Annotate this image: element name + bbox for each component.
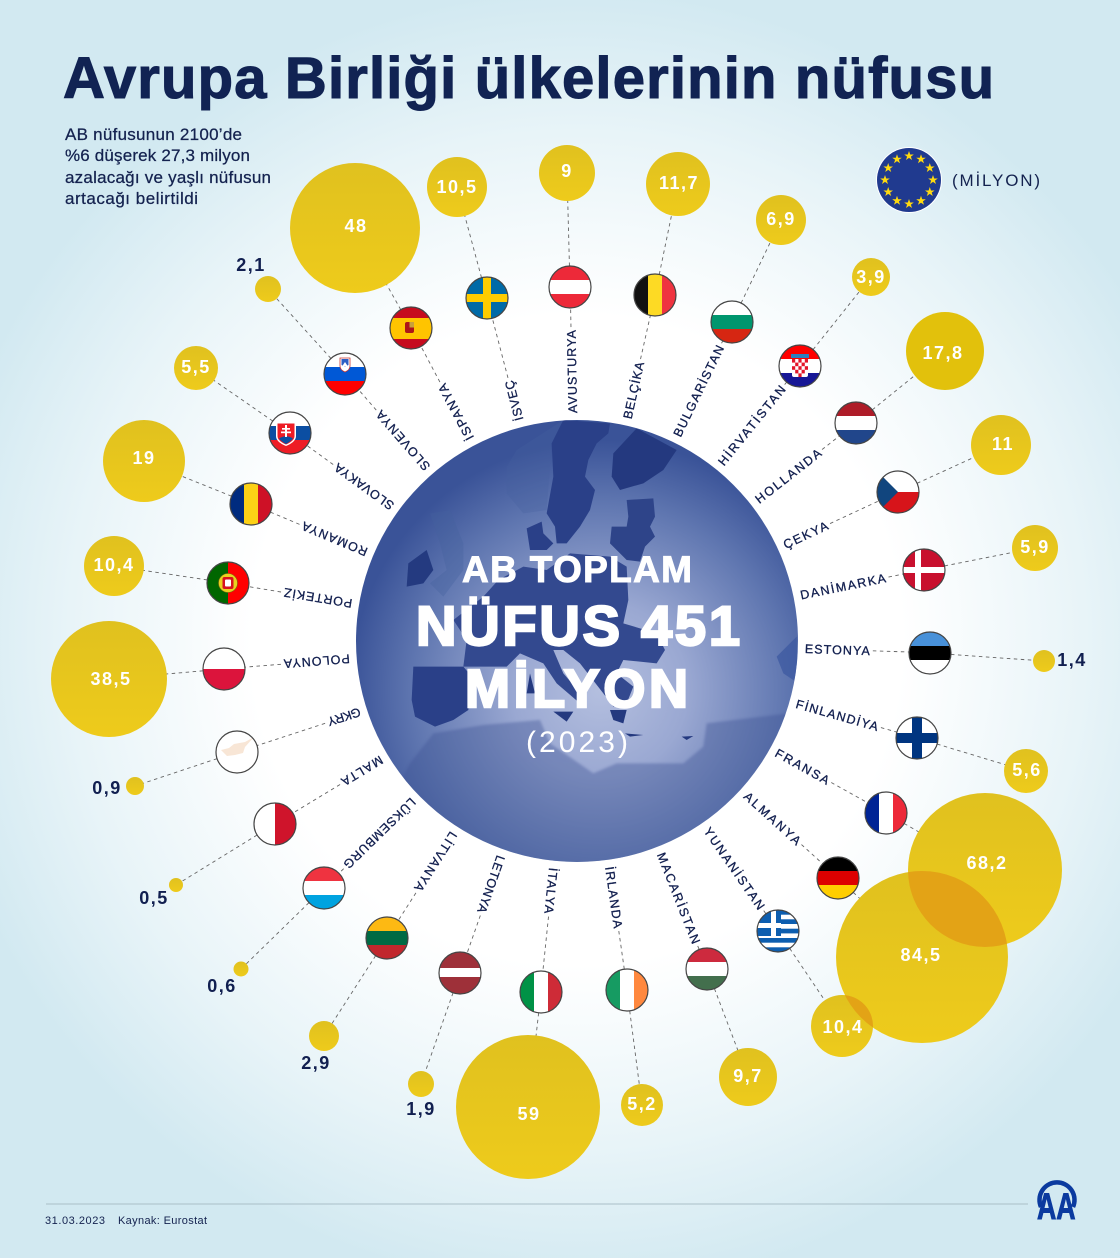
- globe headline: [416, 549, 740, 719]
- bubble: 68,2: [908, 793, 1062, 947]
- label: Fransa: FRANSA: [773, 746, 832, 788]
- country: Macaristan: [654, 851, 777, 1106]
- date: 31.03.2023: [45, 1215, 105, 1227]
- country: İspanya: [290, 163, 477, 443]
- title: Avrupa Birliği ülkelerinin nüfusu: [63, 46, 994, 111]
- flag: Finlandiya: [896, 717, 938, 759]
- bubble: 5,6: 5,6: [1012, 760, 1042, 780]
- bubble: 5,9: 5,9: [1020, 537, 1050, 557]
- value: 0,5: 0,5: [139, 888, 169, 908]
- label: Malta: MALTA: [338, 753, 385, 789]
- label: Hırvatistan: HİRVATİSTAN: [715, 383, 789, 469]
- flag: Hırvatistan: [779, 345, 821, 387]
- flag: İspanya: [390, 307, 432, 349]
- label: Almanya: ALMANYA: [741, 789, 804, 849]
- flag: Lüksemburg: [303, 867, 345, 909]
- flag: İtalya: [520, 971, 562, 1013]
- globe headline: MİLYON: [465, 659, 688, 719]
- bubble: 84,5: 84,5: [900, 945, 942, 965]
- bubble: 0,9: [126, 777, 144, 795]
- label: İrlanda: İRLANDA: [602, 866, 625, 930]
- value: 1,4: 1,4: [1057, 650, 1087, 670]
- label: Danimarka: DANİMARKA: [799, 571, 888, 603]
- intro text: AB nüfusunun 2100’de: [65, 125, 242, 144]
- bubble: 0,5: [169, 878, 183, 892]
- country: Slovakya: [174, 346, 397, 513]
- flag: Estonya: [909, 632, 951, 674]
- bubble: 19: [103, 420, 185, 502]
- flag: Danimarka: [903, 549, 945, 591]
- country: Almanya: [741, 789, 1008, 1043]
- country: Belçika: [621, 152, 710, 420]
- country: Danimarka: [799, 525, 1058, 603]
- value: 2,1: 2,1: [236, 255, 266, 275]
- country: İtalya: [456, 867, 600, 1179]
- label: Yunanistan: YUNANİSTAN: [701, 825, 767, 912]
- flag: Polonya: [203, 648, 245, 690]
- bubble: 59: 59: [517, 1104, 541, 1124]
- bubble: 9: [539, 145, 595, 201]
- label: Lüksemburg: LÜKSEMBURG: [341, 795, 418, 871]
- flag: GKRY: [216, 731, 258, 773]
- flag: Malta: [254, 803, 296, 845]
- country: GKRY: [92, 705, 362, 798]
- bubble: 5,5: [174, 346, 218, 390]
- label: Finlandiya: FİNLANDİYA: [794, 697, 880, 734]
- label: Romanya: ROMANYA: [299, 518, 370, 559]
- flag: İsveç: [466, 277, 508, 319]
- country: Slovenya: [236, 255, 433, 473]
- flag: Romanya: [230, 483, 272, 525]
- bubble: 48: [290, 163, 420, 293]
- country: İrlanda: [602, 866, 663, 1126]
- bubble: 6,9: 6,9: [766, 209, 796, 229]
- bubble: 5,2: [621, 1084, 663, 1126]
- bubble: 10,4: 10,4: [822, 1017, 864, 1037]
- globe year: (2023): [526, 726, 628, 759]
- label: Slovakya: SLOVAKYA: [331, 460, 397, 513]
- country: Letonya: [406, 854, 507, 1119]
- country: İsveç: [427, 157, 526, 422]
- globe headline: NÜFUS 451: [416, 594, 740, 657]
- label: Macaristan: MACARİSTAN: [654, 851, 703, 946]
- flag: Avusturya: [549, 266, 591, 308]
- country: Portekiz: [84, 536, 353, 610]
- bubble: 1,9: [408, 1071, 434, 1097]
- intro text: artacağı belirtildi: [65, 189, 198, 208]
- country: Finlandiya: [794, 697, 1048, 793]
- bubble: 2,9: [309, 1021, 339, 1051]
- bubble: 11: [971, 415, 1031, 475]
- globe with map of Europe: [350, 420, 817, 877]
- value: 1,9: 1,9: [406, 1099, 436, 1119]
- country: Malta: [139, 753, 385, 908]
- bubble: 84,5: [836, 871, 1008, 1043]
- bubble: 17,8: [906, 312, 984, 390]
- bubble: 9,7: [719, 1048, 777, 1106]
- intro text: [65, 125, 271, 208]
- legend: EU flag and unit: [876, 147, 1040, 213]
- bubble: 1,4: [1033, 650, 1055, 672]
- bubble: 68,2: 68,2: [966, 853, 1008, 873]
- bubble: 11: 11: [992, 434, 1014, 454]
- bubble: 5,2: 5,2: [627, 1094, 657, 1114]
- unit label: (MİLYON): [952, 171, 1040, 190]
- flag: Hollanda: [835, 402, 877, 444]
- label: İspanya: İSPANYA: [435, 381, 477, 443]
- flag: Portekiz: [207, 562, 249, 604]
- bubble: 0,6: [234, 962, 248, 976]
- bubble: 9,7: 9,7: [733, 1066, 763, 1086]
- source: Kaynak: Eurostat: [118, 1215, 207, 1227]
- country: Çekya: [781, 415, 1031, 552]
- bubble: 19: 19: [132, 448, 156, 468]
- bubble: 48: 48: [344, 216, 368, 236]
- bubble: 3,9: 3,9: [856, 267, 886, 287]
- bubble: 38,5: [51, 621, 167, 737]
- country: Hollanda: [753, 312, 984, 507]
- flag: Slovenya: [324, 353, 366, 395]
- footer: [45, 1204, 1028, 1227]
- country: Yunanistan: [701, 825, 873, 1057]
- country: Bulgaristan: [671, 195, 806, 439]
- label: Estonya: ESTONYA: [805, 642, 871, 658]
- label: Hollanda: HOLLANDA: [753, 446, 825, 507]
- bubble: 6,9: [756, 195, 806, 245]
- label: Letonya: LETONYA: [474, 854, 507, 915]
- bubble: 5,5: 5,5: [181, 357, 211, 377]
- bubble: 10,5: [427, 157, 487, 217]
- bubble: 11,7: 11,7: [659, 173, 699, 193]
- flag: Slovakya: [269, 412, 311, 454]
- intro text: azalacağı ve yaşlı nüfusun: [65, 168, 271, 187]
- bubble: 10,4: 10,4: [93, 555, 135, 575]
- bubble: 17,8: 17,8: [922, 343, 964, 363]
- bubble: 9: 9: [561, 161, 573, 181]
- country: Lüksemburg: [207, 795, 418, 996]
- flag: Yunanistan: [757, 910, 799, 952]
- bubble: 5,6: [1004, 749, 1048, 793]
- intro text: %6 düşerek 27,3 milyon: [65, 146, 250, 165]
- flag: Letonya: [439, 952, 481, 994]
- label: Avusturya: AVUSTURYA: [565, 329, 580, 413]
- country: Romanya: [103, 420, 370, 559]
- icon: EU flag: [876, 147, 942, 213]
- label: Litvanya: LİTVANYA: [411, 829, 460, 894]
- label: Bulgaristan: BULGARİSTAN: [671, 343, 727, 439]
- flag: Almanya: [817, 857, 859, 899]
- label: Slovenya: SLOVENYA: [373, 407, 433, 473]
- bubble: 10,4: [84, 536, 144, 596]
- bubble: 11,7: [646, 152, 710, 216]
- country: Avusturya: [539, 145, 595, 413]
- bubble: 2,1: [255, 276, 281, 302]
- label: Çekya: ÇEKYA: [781, 519, 831, 552]
- country: Polonya: [51, 621, 350, 737]
- flag: Litvanya: [366, 917, 408, 959]
- flag: Bulgaristan: [711, 301, 753, 343]
- value: 0,6: 0,6: [207, 976, 237, 996]
- label: İsveç: İSVEÇ: [502, 379, 526, 422]
- flag: Fransa: [865, 792, 907, 834]
- bubble: 10,5: 10,5: [436, 177, 478, 197]
- country: Litvanya: [301, 829, 460, 1073]
- globe headline: AB TOPLAM: [462, 549, 692, 590]
- label: Belçika: BELÇİKA: [621, 360, 647, 420]
- bubble overlap: Almanya and Yunanistan: [845, 995, 873, 1028]
- flag: Macaristan: [686, 948, 728, 990]
- flag: İrlanda: [606, 969, 648, 1011]
- icon: AA logo: AA: [1037, 1186, 1076, 1227]
- bubble: 59: [456, 1035, 600, 1179]
- bubble: 5,9: [1012, 525, 1058, 571]
- flag: Çekya: [877, 471, 919, 513]
- label: Portekiz: PORTEKİZ: [283, 585, 353, 610]
- label: İtalya: İTALYA: [541, 867, 560, 915]
- bubble: 10,4: [811, 995, 873, 1057]
- country: Fransa: [773, 746, 1062, 947]
- bubble overlap: Almanya and Fransa: [908, 871, 1007, 947]
- country: Hırvatistan: [715, 258, 890, 469]
- label: GKRY: GKRY: [325, 705, 362, 729]
- bubble: 3,9: [852, 258, 890, 296]
- bubble: 38,5: 38,5: [90, 669, 132, 689]
- flag: Belçika: [634, 274, 676, 316]
- country: Estonya: [805, 632, 1087, 674]
- value: 0,9: 0,9: [92, 778, 122, 798]
- label: Polonya: POLONYA: [283, 651, 350, 671]
- value: 2,9: 2,9: [301, 1053, 331, 1073]
